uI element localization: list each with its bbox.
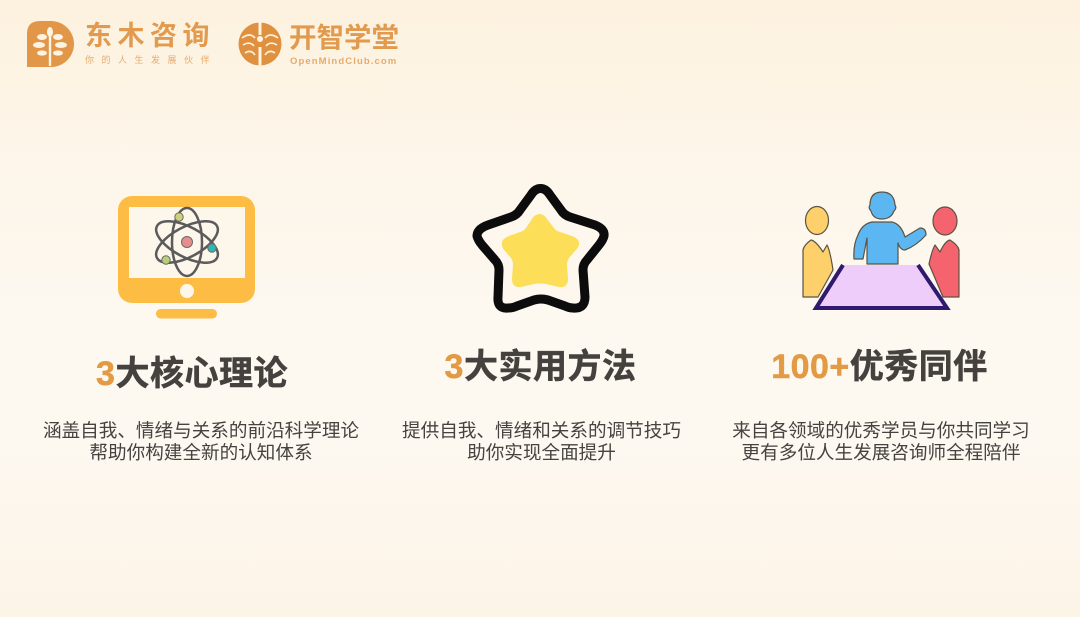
logo url: OpenMindClub.com bbox=[290, 56, 397, 67]
logo: Dongmu Consulting bbox=[27, 21, 217, 67]
text block: column 3: 来自各领域的优秀学员与你共同学习 bbox=[732, 420, 1030, 441]
logo: OpenMindClub bbox=[238, 22, 399, 67]
text block: column 1: 帮助你构建全新的认知体系 bbox=[89, 442, 313, 463]
heading: 3 core theories: 3大核心理论 bbox=[96, 355, 288, 393]
person: left bbox=[803, 206, 833, 297]
icon: star bbox=[472, 184, 609, 313]
text block: column 3 bbox=[732, 420, 1030, 463]
icon: brain bbox=[238, 22, 282, 66]
text block: column 2 bbox=[402, 420, 681, 463]
icon: people at a table bbox=[802, 191, 960, 310]
heading: 3 practical methods: 3大实用方法 bbox=[445, 348, 636, 386]
text block: column 3: 更有多位人生发展咨询师全程陪伴 bbox=[742, 442, 1020, 463]
text block: column 2: 提供自我、情绪和关系的调节技巧 bbox=[402, 420, 681, 441]
table bbox=[816, 265, 947, 308]
logo tagline: 你的人生发展伙伴 bbox=[85, 55, 217, 65]
text block: column 1: 涵盖自我、情绪与关系的前沿科学理论 bbox=[43, 420, 359, 441]
text block: column 2: 助你实现全面提升 bbox=[467, 442, 616, 463]
heading: 100+ peers: 100+优秀同伴 bbox=[771, 348, 988, 386]
icon: tree badge bbox=[27, 21, 74, 67]
text block: column 1 bbox=[43, 420, 359, 463]
person: right bbox=[929, 207, 959, 297]
icon: monitor with atom bbox=[118, 196, 255, 318]
logo name: 开智学堂 bbox=[289, 22, 399, 53]
logo name: 东木咨询 bbox=[85, 21, 215, 51]
person: center bbox=[854, 192, 926, 264]
